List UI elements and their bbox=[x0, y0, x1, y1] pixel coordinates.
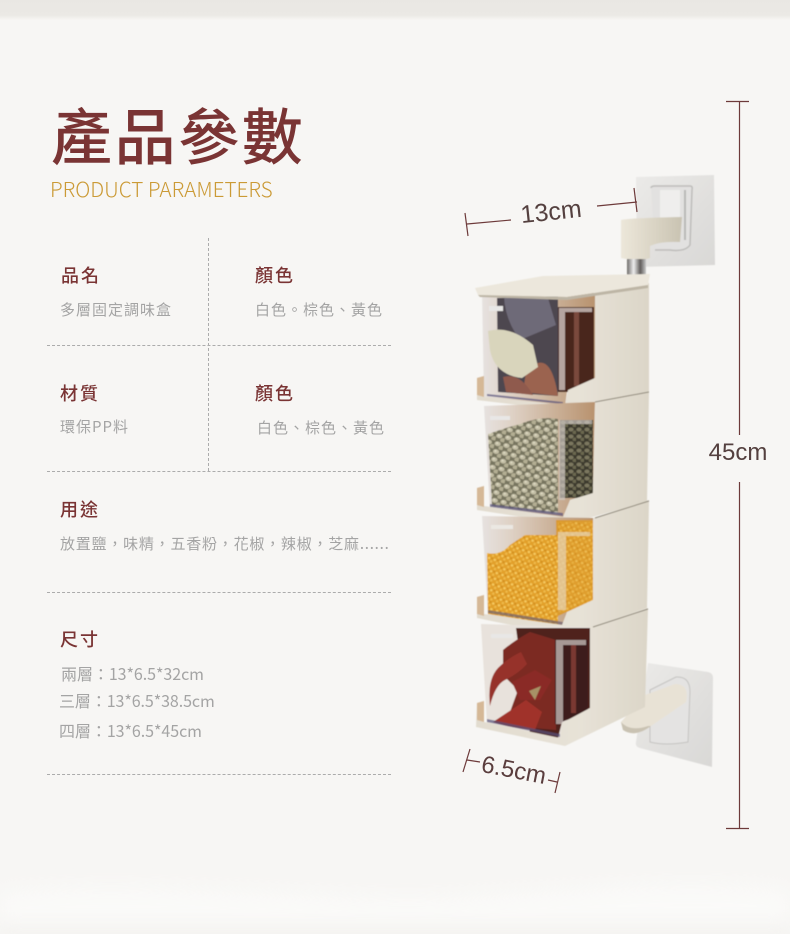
text: usage value: 放置鹽，味精，五香粉，花椒，辣椒，芝麻...... bbox=[60, 533, 390, 554]
drawer 4: chili peppers bbox=[481, 624, 590, 739]
shelf 2 bbox=[477, 392, 649, 524]
text: product name value: 多層固定調味盒 bbox=[60, 299, 172, 320]
lid bbox=[475, 274, 650, 297]
heading: material: 材質 bbox=[60, 380, 100, 406]
dimension: 45cm height: 45cm bbox=[709, 439, 767, 466]
heading: color: 顏色 bbox=[255, 262, 295, 288]
panel: parameter table bbox=[208, 238, 209, 471]
text: color second value: 白色、棕色、黃色 bbox=[257, 417, 385, 438]
text: color value: 白色。棕色、黃色 bbox=[255, 299, 383, 320]
heading: color second: 顏色 bbox=[255, 380, 295, 406]
dimension: 45cm height bbox=[709, 101, 767, 829]
bottom wall plate bbox=[636, 663, 713, 767]
text: three tier size: 三層：13*6.5*38.5cm bbox=[59, 688, 215, 712]
shelf 4 bbox=[476, 608, 648, 746]
top adhesive plate and hook bbox=[636, 175, 715, 267]
metal stem bbox=[627, 259, 646, 283]
text: material value: 環保PP料 bbox=[60, 416, 129, 437]
product: wall-mounted spice rack bbox=[475, 175, 715, 767]
heading: size: 尺寸 bbox=[60, 626, 100, 652]
drawer 1: bay leaves bbox=[482, 293, 595, 406]
bottom arm and clip bbox=[621, 677, 690, 744]
drawer 2: lentils bbox=[484, 402, 595, 519]
heading: usage: 用途 bbox=[60, 496, 100, 522]
top arm bbox=[621, 217, 682, 260]
subtitle: PRODUCT PARAMETERS bbox=[50, 173, 273, 203]
title: 產品參數 bbox=[51, 88, 305, 177]
dimension: 13cm width: 13cm bbox=[519, 195, 583, 229]
dimension: 13cm width bbox=[465, 188, 637, 236]
dimension: 6.5cm depth bbox=[463, 749, 560, 793]
text: four tier size: 四層：13*6.5*45cm bbox=[59, 718, 202, 742]
drawer 3: corn grits bbox=[482, 516, 593, 627]
shelf 1 bbox=[477, 283, 649, 411]
shelf 3 bbox=[477, 500, 649, 636]
vertical divider bbox=[208, 238, 209, 471]
text: two tier size: 兩層：13*6.5*32cm bbox=[61, 661, 204, 685]
dimension: 6.5cm depth: 6.5cm bbox=[479, 751, 548, 790]
heading: product name: 品名 bbox=[61, 262, 101, 288]
